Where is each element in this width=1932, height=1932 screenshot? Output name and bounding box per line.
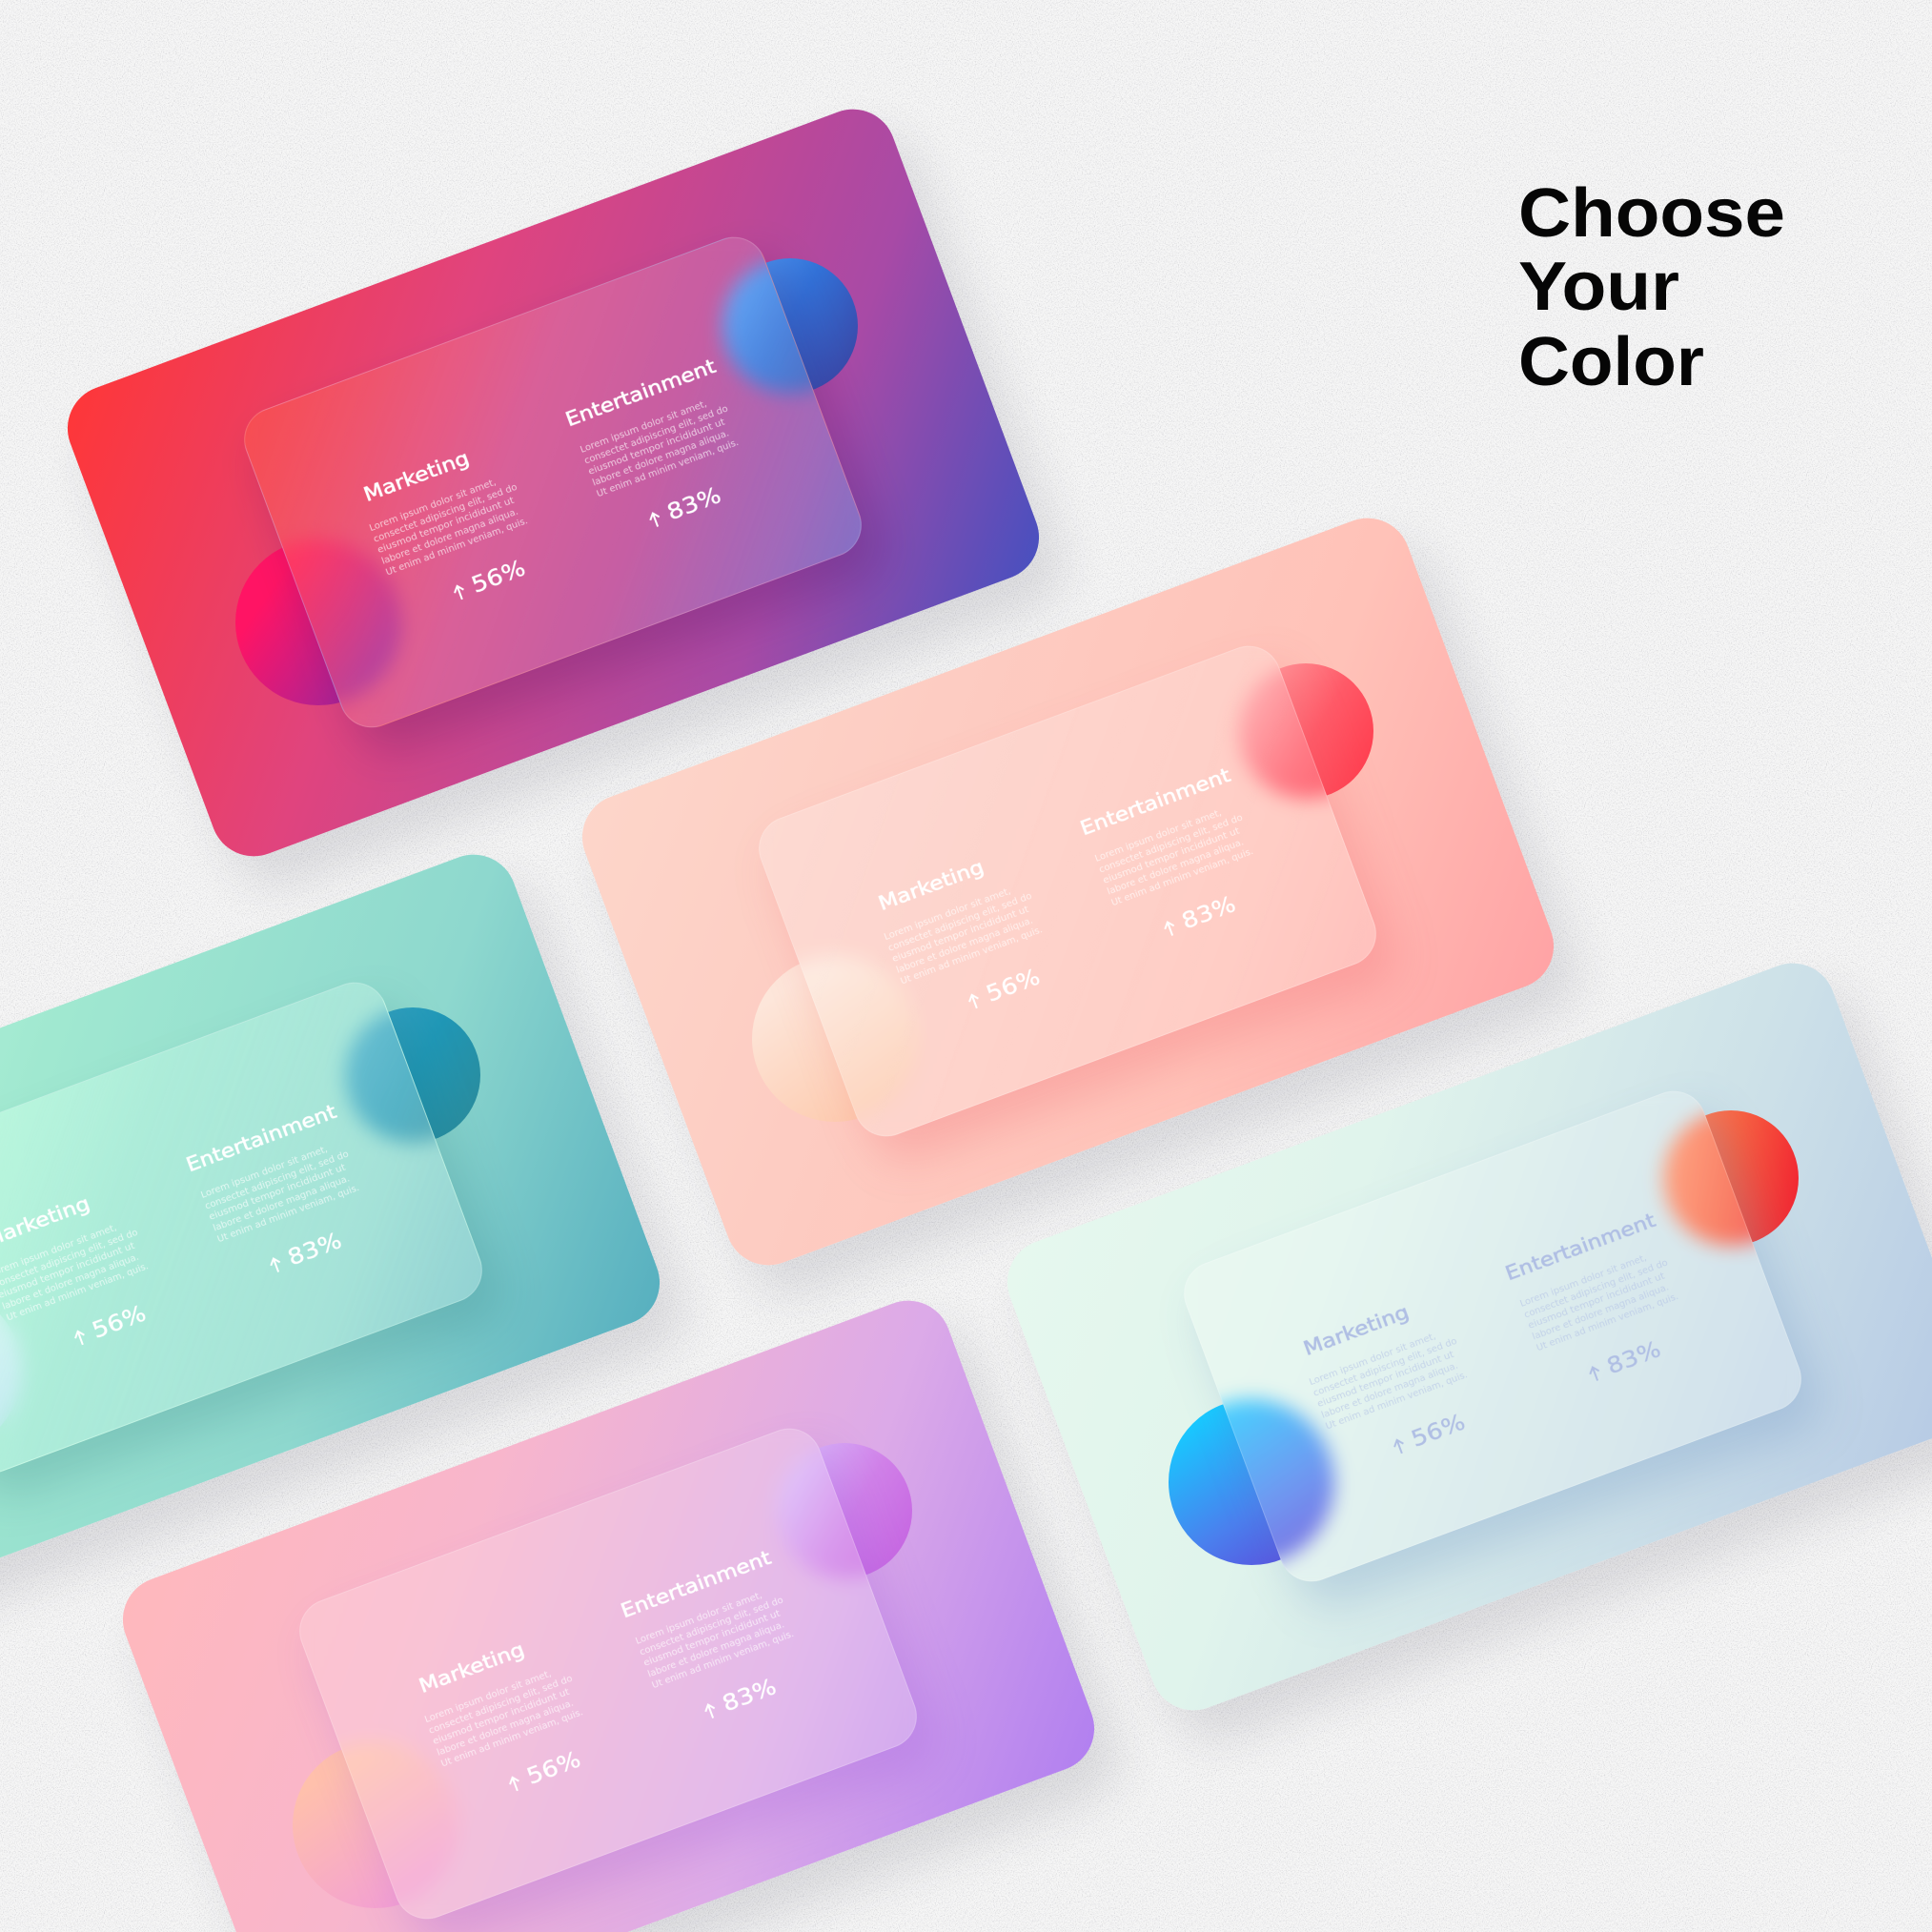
text block: Marketing description: Lorem ipsum dolor sit amet, <box>368 478 498 534</box>
text block: Marketing description: eiusmod tempor incididunt ut <box>432 1687 571 1747</box>
text block: Marketing description: eiusmod tempor incididunt ut <box>376 496 516 556</box>
icon: up arrow <box>1163 921 1177 937</box>
text block: Marketing description <box>883 880 1046 986</box>
circle: teal <box>345 1007 480 1143</box>
icon: up arrow <box>703 1703 718 1719</box>
text block: Entertainment description: eiusmod tempor incididunt ut <box>208 1163 347 1223</box>
stat: 83%: 83% <box>1604 1337 1664 1380</box>
text block: Marketing description: Ut enim ad minim veniam, quis. <box>1324 1370 1469 1432</box>
icon: up arrow <box>453 584 467 601</box>
circle: blue <box>722 258 858 394</box>
text block: Entertainment description: eiusmod tempor incididunt ut <box>1102 826 1241 886</box>
title: Choose <box>1518 175 1785 252</box>
icon: up arrow <box>648 512 662 528</box>
heading: Entertainment: Entertainment <box>562 355 719 431</box>
text block: Marketing description: Ut enim ad minim veniam, quis. <box>439 1707 584 1769</box>
text block: Marketing description: Ut enim ad minim veniam, quis. <box>899 925 1044 986</box>
heading: Marketing: Marketing <box>416 1637 527 1698</box>
panel: teal colour card <box>0 854 690 1607</box>
text block: Marketing description: Ut enim ad minim veniam, quis. <box>5 1261 150 1323</box>
circle: violet <box>776 1443 911 1578</box>
text block: Entertainment description: Ut enim ad minim veniam, quis. <box>596 437 740 499</box>
text block: Marketing description: consectet adipiscing elit, sed do <box>427 1674 574 1737</box>
heading: Marketing: Marketing <box>360 446 472 506</box>
text block: Entertainment description <box>1518 1247 1681 1353</box>
text block: Entertainment description: labore et dolore magna aliqua. <box>1106 837 1246 898</box>
circle: red <box>1238 663 1373 799</box>
circle: peach pink <box>293 1742 458 1908</box>
heading: Entertainment: Entertainment <box>618 1546 774 1622</box>
glass panel <box>290 1419 926 1928</box>
title: Your <box>1518 249 1679 325</box>
icon: up arrow <box>508 1776 522 1793</box>
text block: Entertainment description: Lorem ipsum dolor sit amet, <box>199 1145 329 1201</box>
text block: Entertainment description: consectet adipiscing elit, sed do <box>1523 1257 1670 1321</box>
text block: Entertainment description: Ut enim ad minim veniam, quis. <box>651 1629 795 1691</box>
text block: Entertainment description: Lorem ipsum dolor sit amet, <box>579 399 708 456</box>
heading: Entertainment: Entertainment <box>183 1100 339 1176</box>
text block: Marketing description: Lorem ipsum dolor sit amet, <box>1308 1332 1437 1388</box>
panel: pale mint to blue colour card <box>1007 963 1932 1746</box>
text block: Entertainment description <box>199 1138 362 1245</box>
text block: Marketing description <box>0 1216 152 1323</box>
glass panel <box>0 973 492 1482</box>
circle: magenta <box>234 539 400 705</box>
text block: Entertainment description: consectet adipiscing elit, sed do <box>583 403 730 467</box>
text block: Entertainment description: Lorem ipsum dolor sit amet, <box>1518 1253 1648 1310</box>
stat: 56%: 56% <box>89 1301 150 1344</box>
text block: Entertainment description: Lorem ipsum dolor sit amet, <box>1093 808 1223 864</box>
stat: 56%: 56% <box>1408 1410 1469 1453</box>
glass panel <box>749 637 1386 1146</box>
stat: 83%: 83% <box>1179 892 1239 935</box>
card background: pale mint to blue gradient <box>995 950 1932 1722</box>
text block: Marketing description: Lorem ipsum dolor sit amet, <box>423 1669 553 1725</box>
stat: 56%: 56% <box>468 556 529 599</box>
card background: pink to violet gradient <box>111 1288 1106 1932</box>
text block: Marketing description: eiusmod tempor incididunt ut <box>891 905 1030 965</box>
heading: Marketing: Marketing <box>1300 1300 1412 1360</box>
stat: 83%: 83% <box>285 1229 345 1271</box>
text block: Entertainment description: labore et dolore magna aliqua. <box>1531 1282 1671 1343</box>
panel: red to blue colour card <box>67 109 1069 892</box>
text block: Marketing description: labore et dolore magna aliqua. <box>1320 1361 1459 1421</box>
circle: blue <box>1169 1399 1334 1565</box>
icon: up arrow <box>1588 1366 1602 1382</box>
panel: pink to violet colour card <box>122 1300 1125 1932</box>
circle: pale blue <box>0 1288 22 1454</box>
text block: Entertainment description: labore et dolore magna aliqua. <box>212 1173 352 1234</box>
text block: Entertainment description <box>634 1584 797 1691</box>
text block: Entertainment description: consectet adipiscing elit, sed do <box>1098 812 1245 876</box>
glass panel <box>1174 1082 1811 1591</box>
text block: Entertainment description: labore et dolore magna aliqua. <box>646 1619 786 1680</box>
text block: Marketing description: eiusmod tempor incididunt ut <box>0 1241 136 1301</box>
title: Color <box>1518 324 1704 400</box>
text block: Marketing description: consectet adipiscing elit, sed do <box>1312 1336 1458 1399</box>
text block: Entertainment description <box>1093 802 1256 908</box>
text block: Marketing description: Ut enim ad minim veniam, quis. <box>384 516 529 578</box>
text block: Marketing description: eiusmod tempor incididunt ut <box>1316 1350 1455 1410</box>
glass panel <box>234 228 871 737</box>
text block: Entertainment description: Ut enim ad minim veniam, quis. <box>1535 1291 1679 1353</box>
text block: Marketing description <box>1308 1325 1471 1432</box>
card background: peach gradient <box>570 505 1565 1277</box>
text block: Entertainment description: eiusmod tempor incididunt ut <box>1527 1271 1666 1332</box>
text block: Marketing description: Lorem ipsum dolor sit amet, <box>883 886 1012 943</box>
text block: Marketing description <box>423 1662 586 1769</box>
heading: Entertainment: Entertainment <box>1502 1209 1658 1285</box>
text block: Entertainment description: Ut enim ad minim veniam, quis. <box>216 1183 360 1245</box>
panel: peach colour card <box>582 519 1584 1300</box>
text block: Marketing description: labore et dolore magna aliqua. <box>895 916 1034 976</box>
text block: Entertainment description: eiusmod tempor incididunt ut <box>642 1609 782 1669</box>
icon: up arrow <box>73 1330 88 1347</box>
text block: Marketing description: consectet adipiscing elit, sed do <box>372 482 519 545</box>
text block: Entertainment description: labore et dolore magna aliqua. <box>591 428 731 489</box>
text block: Entertainment description <box>579 393 742 499</box>
heading: Entertainment: Entertainment <box>1077 763 1233 840</box>
text block: Entertainment description: Ut enim ad minim veniam, quis. <box>1110 846 1254 908</box>
stat: 83%: 83% <box>720 1675 780 1718</box>
stat: 56%: 56% <box>523 1747 584 1790</box>
icon: up arrow <box>1393 1438 1407 1455</box>
text block: Marketing description: labore et dolore magna aliqua. <box>380 507 519 567</box>
text block: Marketing description: labore et dolore magna aliqua. <box>436 1698 575 1759</box>
text block: Entertainment description: consectet adipiscing elit, sed do <box>204 1149 351 1212</box>
card background: mint to teal gradient <box>0 842 671 1614</box>
text block: Marketing description: labore et dolore magna aliqua. <box>1 1252 140 1312</box>
text block: Marketing description <box>368 471 531 578</box>
title <box>1518 175 1785 400</box>
stat: 56%: 56% <box>983 965 1044 1007</box>
text block: Entertainment description: Lorem ipsum dolor sit amet, <box>634 1591 763 1647</box>
heading: Marketing: Marketing <box>875 855 986 915</box>
circle: cream <box>752 956 918 1122</box>
icon: up arrow <box>967 993 982 1010</box>
icon: up arrow <box>269 1257 283 1273</box>
card background: red to blue gradient <box>55 96 1050 868</box>
text block: Entertainment description: consectet adipiscing elit, sed do <box>639 1595 785 1658</box>
circle: orange red <box>1663 1110 1799 1246</box>
text block: Entertainment description: eiusmod tempor incididunt ut <box>587 417 726 478</box>
stat: 83%: 83% <box>664 483 724 526</box>
text block: Marketing description: consectet adipiscing elit, sed do <box>886 891 1033 954</box>
